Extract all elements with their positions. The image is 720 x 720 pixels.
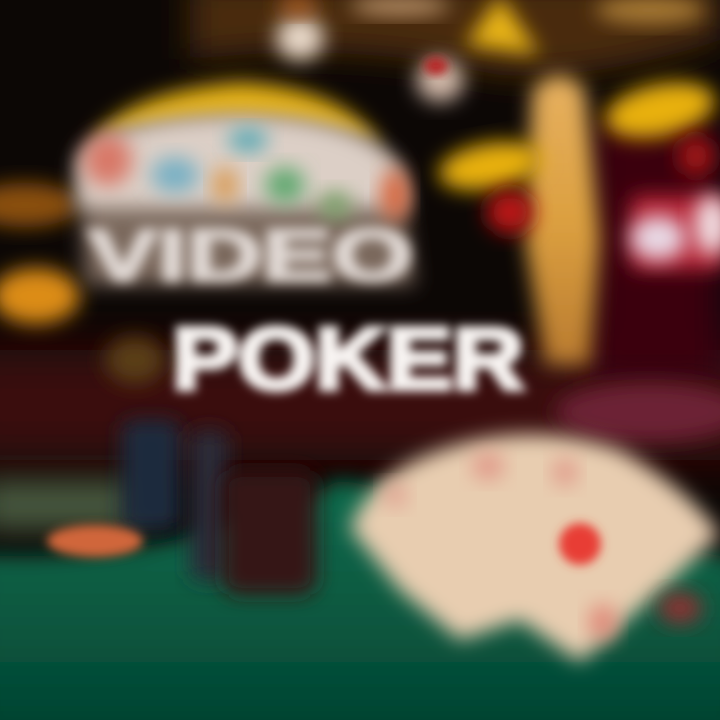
table edge right xyxy=(555,382,720,442)
heading text: POKER: POKER xyxy=(172,309,524,408)
fan of playing cards xyxy=(350,434,720,662)
poker table felt xyxy=(0,480,720,720)
sign: yellow arch xyxy=(95,82,380,145)
sign: white panel xyxy=(78,116,415,285)
heading text: VIDEO: VIDEO xyxy=(88,216,413,296)
red lights and white sign on the right xyxy=(486,136,720,270)
yellow lamps xyxy=(435,73,720,198)
left orange lights xyxy=(0,183,80,324)
chip stacks xyxy=(47,336,317,595)
ceiling lights xyxy=(276,0,705,102)
golden column xyxy=(525,75,600,365)
